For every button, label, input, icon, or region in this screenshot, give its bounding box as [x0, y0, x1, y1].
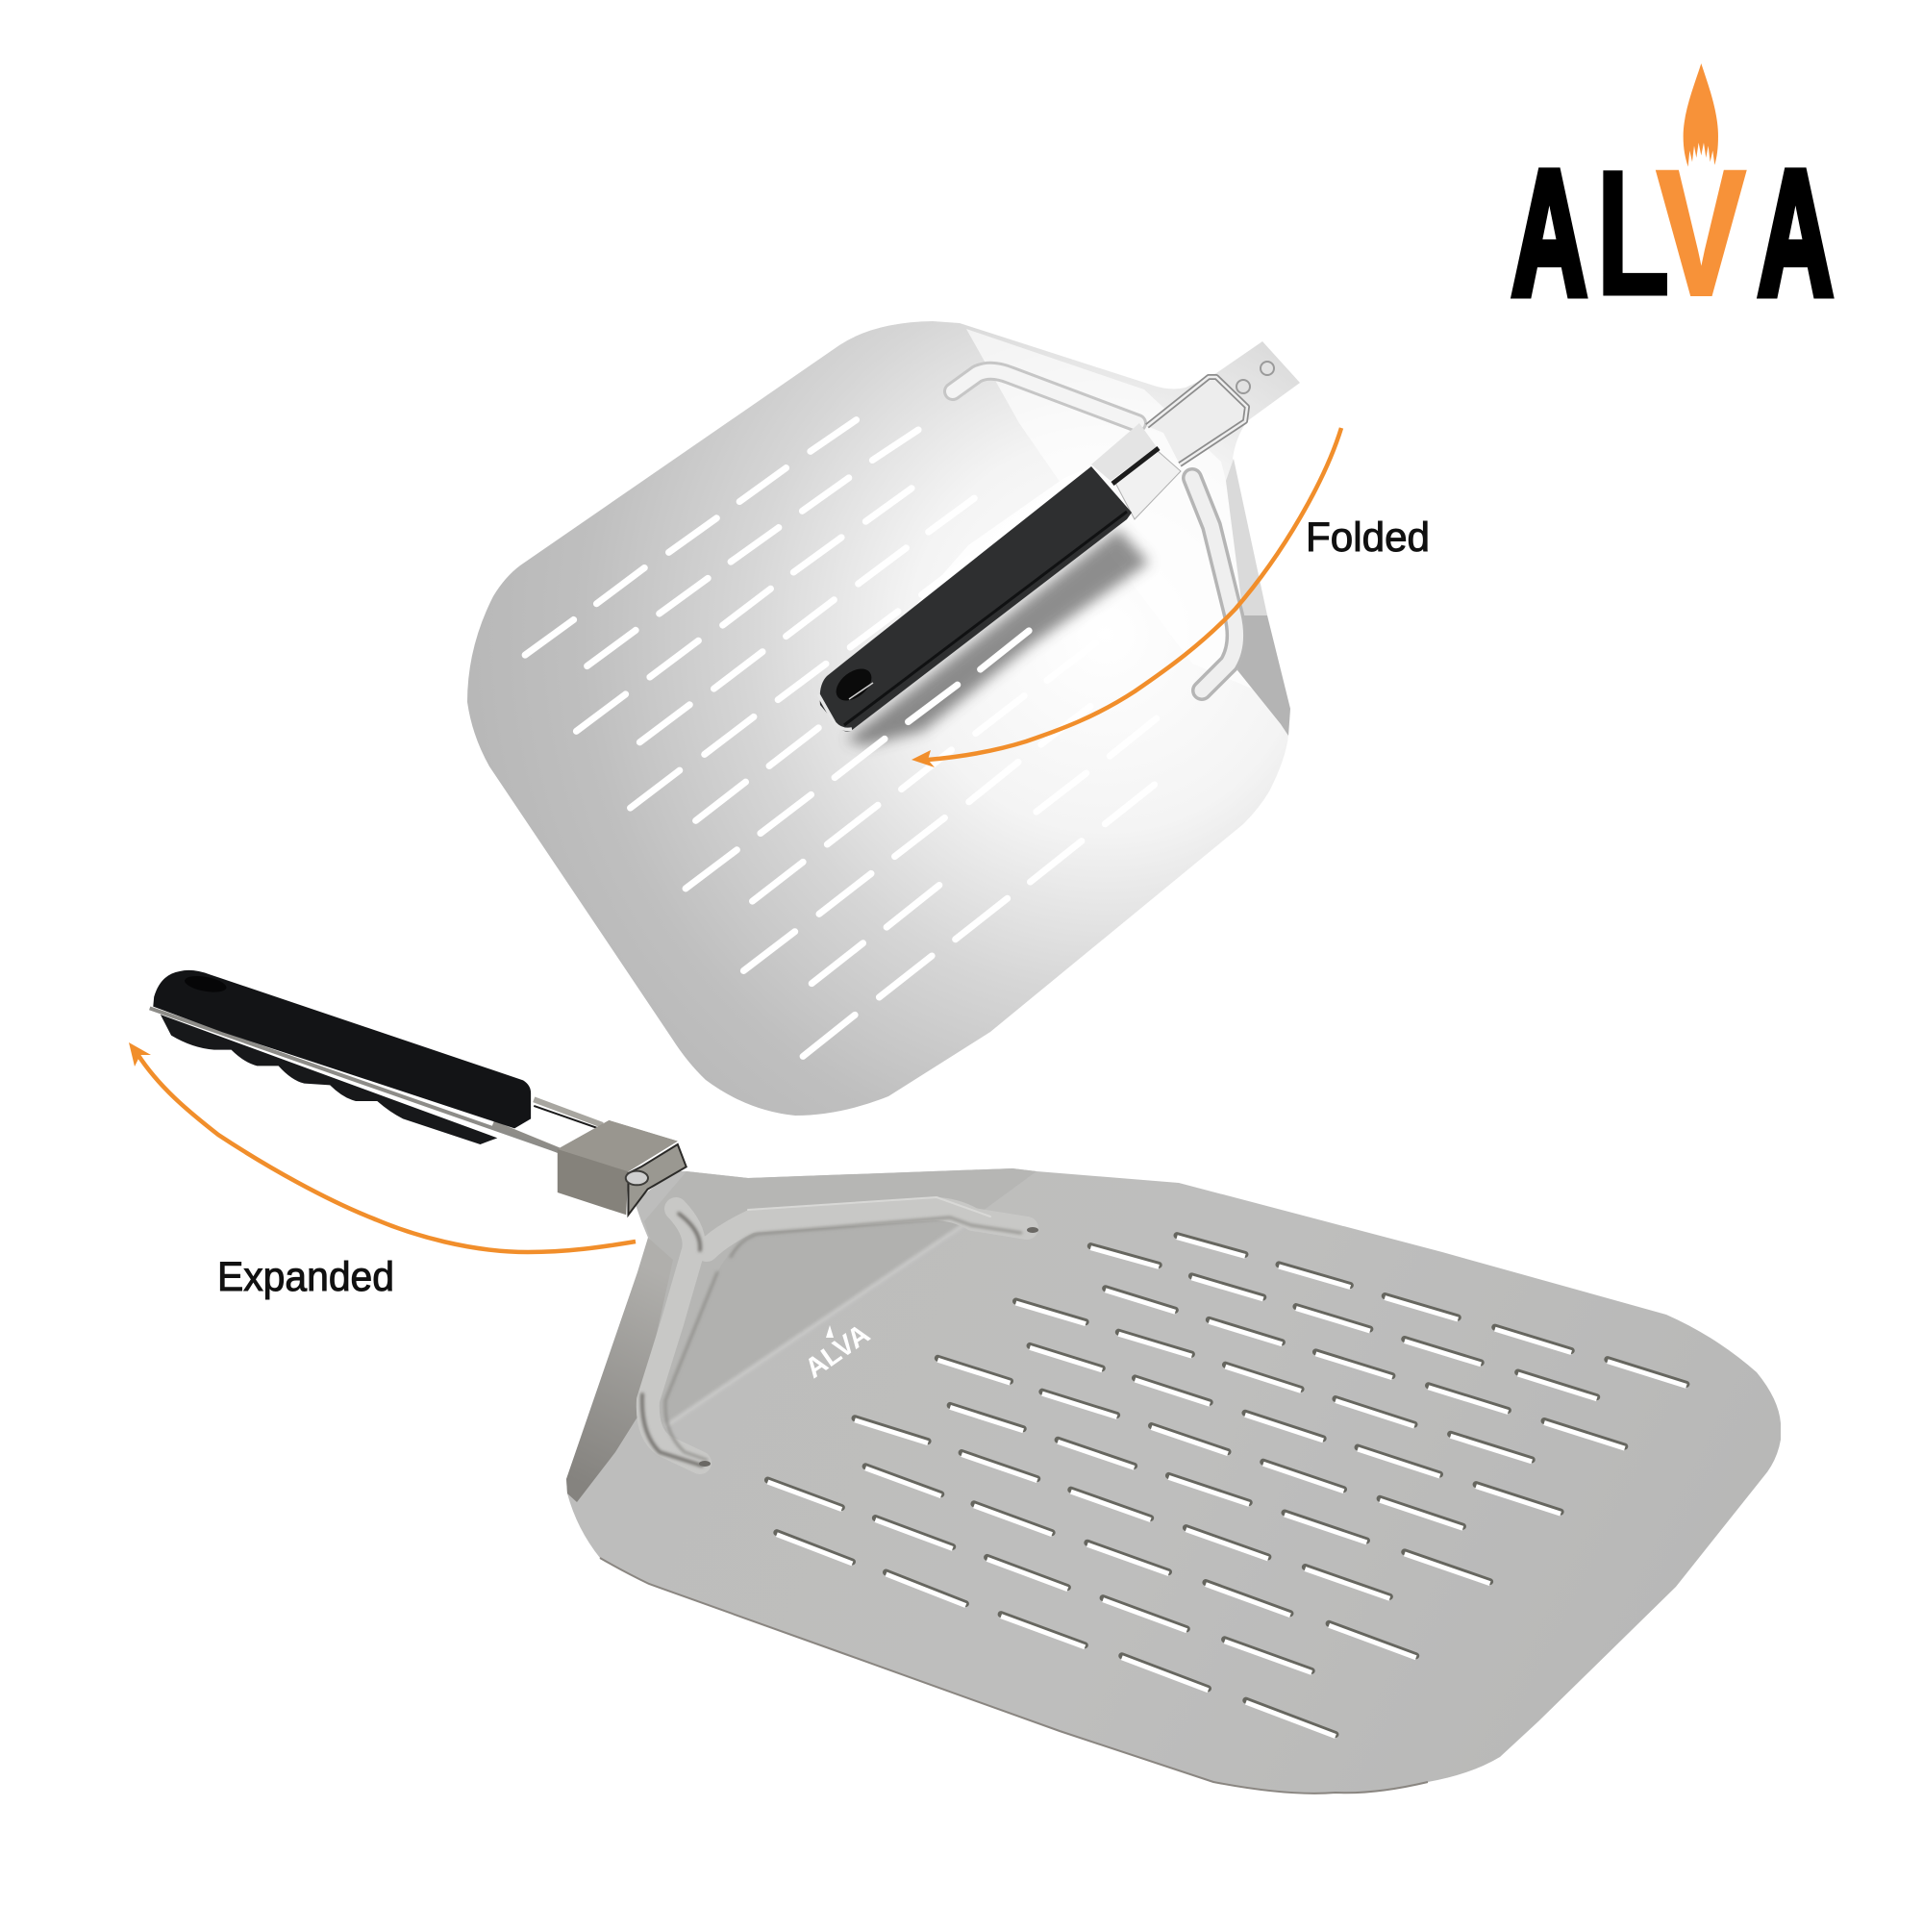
- expanded peel slot shadows: [767, 1236, 1686, 1735]
- expanded peel bottom lip: [600, 1558, 1428, 1794]
- hinge pin: [626, 1171, 648, 1185]
- folded peel right rib: [1192, 478, 1236, 690]
- expanded peel blade: [566, 1168, 1781, 1794]
- folded handle grip: [820, 466, 1132, 732]
- folded peel neck holes: [1236, 362, 1274, 393]
- expanded peel ribs: [642, 1197, 1027, 1466]
- hinge bracket: [558, 1120, 678, 1215]
- folded peel top rib: [953, 371, 1137, 423]
- label: Folded: Folded: [1306, 514, 1430, 561]
- logo letter V: V: [1657, 134, 1746, 333]
- folded pizza peel: [467, 321, 1341, 1116]
- blade logo wordmark: ALVA: [800, 1318, 876, 1385]
- expanded handle strip: [150, 1008, 558, 1151]
- expanded peel throat: [615, 1168, 1036, 1443]
- logo letter L: L: [1596, 134, 1670, 333]
- expanded handle hanging hole: [183, 973, 229, 995]
- folded peel frame reflection: [966, 329, 1284, 702]
- folded handle reflection: [913, 466, 1091, 608]
- blade logo flame: [826, 1325, 834, 1338]
- arrow: expanded direction: [129, 1042, 636, 1252]
- folded handle hanging hole: [830, 663, 878, 707]
- folded peel side plate: [1237, 615, 1290, 736]
- expanded peel diagonal highlight: [665, 1224, 964, 1426]
- folded handle base trim: [818, 694, 852, 729]
- arrow: folded direction: [912, 428, 1341, 767]
- folded peel slots: [525, 420, 1157, 1056]
- folded handle seam: [844, 512, 1127, 725]
- folded handle cast shadow: [846, 529, 1149, 745]
- expanded peel slots: [767, 1238, 1686, 1737]
- logo letter A: A: [1511, 135, 1587, 333]
- folded peel side plate upper: [1226, 459, 1267, 615]
- expanded peel side plate: [566, 1238, 673, 1502]
- blade logo mark: [800, 1318, 876, 1385]
- hinge bracket top: [558, 1120, 678, 1171]
- icon: flame: [1684, 63, 1718, 166]
- folded handle ferrule: [1091, 423, 1181, 519]
- folded handle wire bracket: [1147, 377, 1247, 464]
- expanded pizza peel: [150, 970, 1781, 1794]
- expanded handle upper grip: [153, 970, 531, 1128]
- logo: ALVA: [1511, 63, 1834, 333]
- folded peel blade: [467, 321, 1300, 1116]
- expanded peel rib ends: [699, 1227, 1038, 1467]
- hinge lever: [628, 1144, 687, 1215]
- label: Expanded: Expanded: [217, 1254, 394, 1300]
- logo letter A, second: A: [1758, 135, 1834, 333]
- expanded handle rods: [493, 1099, 603, 1151]
- expanded peel frame interior: [665, 1217, 964, 1426]
- expanded handle lower grip: [161, 1015, 497, 1144]
